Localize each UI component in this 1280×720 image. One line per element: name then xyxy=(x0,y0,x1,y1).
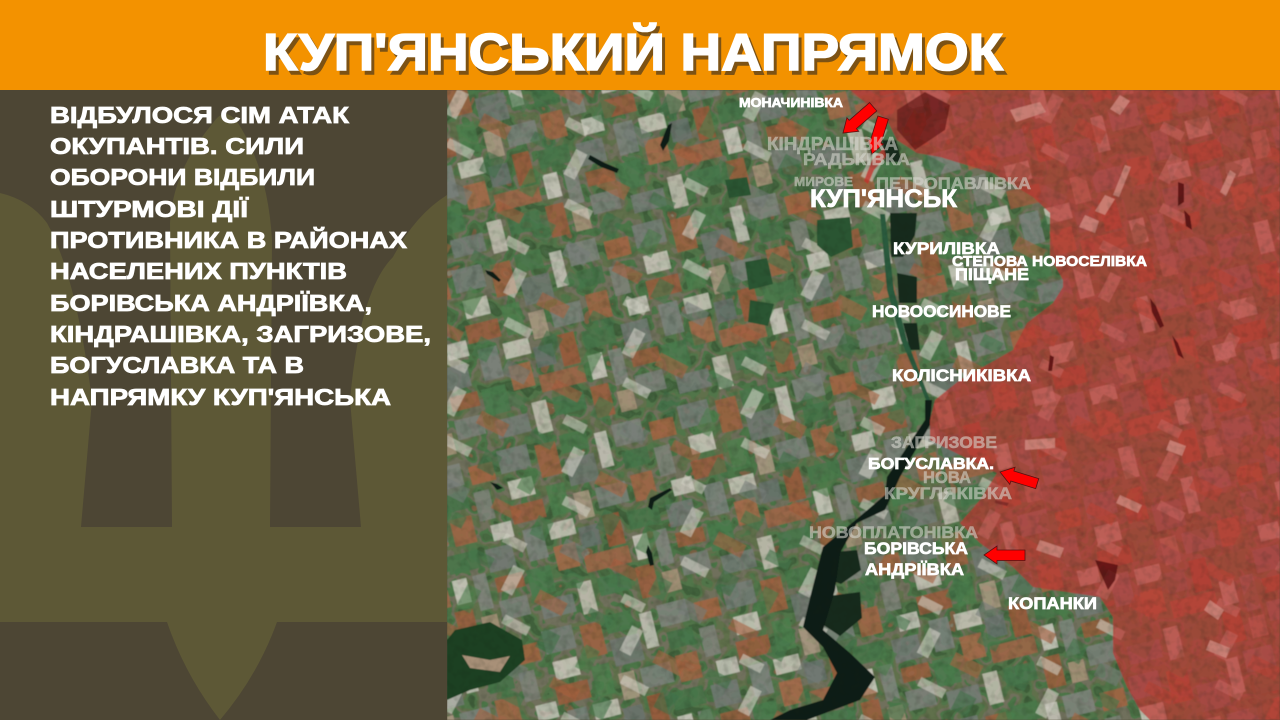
forest patches xyxy=(725,177,853,326)
river xyxy=(770,214,932,720)
summary text: БОГУСЛАВКА ТА В xyxy=(50,352,304,378)
label: Novoplatonivka: НОВОПЛАТОНІВКА xyxy=(809,523,978,542)
label: Kolisnykivka: КОЛІСНИКІВКА xyxy=(892,367,1031,385)
label: Stepova Novoselivka: СТЕПОВА НОВОСЕЛІВКА xyxy=(952,253,1147,270)
arrow: north attack 2 xyxy=(864,115,891,156)
forest bottom-left tan clearing xyxy=(462,655,510,672)
dark ponds xyxy=(485,123,1009,566)
trident emblem xyxy=(0,114,447,720)
label: Zahryzove: ЗАГРИЗОВЕ xyxy=(891,433,997,452)
title: КУП'ЯНСЬКИЙ НАПРЯМОК xyxy=(263,23,1003,82)
label: Pishchane: ПІЩАНЕ xyxy=(955,265,1029,284)
dark reservoir xyxy=(1095,560,1118,590)
summary text: КІНДРАШІВКА, ЗАГРИЗОВЕ, xyxy=(50,321,431,347)
summary text: ОКУПАНТІВ. СИЛИ xyxy=(50,133,304,159)
summary text: ПРОТИВНИКА В РАЙОНАХ xyxy=(50,226,407,253)
summary text: ОБОРОНИ ВІДБИЛИ xyxy=(50,164,315,190)
summary text: НАПРЯМКУ КУП'ЯНСЬКА xyxy=(50,384,391,410)
label: Petropavlivka: ПЕТРОПАВЛІВКА xyxy=(876,174,1031,193)
summary text: БОРІВСЬКА АНДРІЇВКА, xyxy=(50,290,372,316)
dark red field xyxy=(897,92,950,150)
label: Kindrashivka: КІНДРАШІВКА xyxy=(767,134,898,154)
label: Myrove: МИРОВЕ xyxy=(794,174,853,189)
occupied territory overlay xyxy=(850,90,1280,720)
label: Monachynivka: МОНАЧИНІВКА xyxy=(739,95,844,110)
satellite map xyxy=(447,90,1280,720)
label: Bohuslavka: БОГУСЛАВКА. xyxy=(868,456,994,473)
arrow: north attack 1 xyxy=(837,100,879,140)
arrow: Borivska Andriivka attack xyxy=(984,546,1025,564)
summary text: ВІДБУЛОСЯ СІМ АТАК xyxy=(50,102,350,128)
label: Borivska: БОРІВСЬКА xyxy=(864,539,968,558)
forest bottom-left xyxy=(447,622,525,700)
label: Kupiansk: КУП'ЯНСЬК xyxy=(810,185,958,213)
label: Kopanky: КОПАНКИ xyxy=(1008,594,1097,613)
summary text: ШТУРМОВІ ДІЇ xyxy=(50,196,249,222)
summary text xyxy=(50,102,431,410)
left panel xyxy=(0,90,447,720)
title: КУП'ЯНСЬКИЙ НАПРЯМОК xyxy=(266,27,1006,86)
label: Radkivka: РАДЬКІВКА xyxy=(803,150,910,169)
dark pools xyxy=(1048,182,1192,371)
label: Nova: НОВА xyxy=(923,468,971,487)
field grain xyxy=(447,90,1280,720)
header bar xyxy=(0,0,1280,90)
arrow: Bohuslavka attack xyxy=(997,463,1040,492)
light fields in occupied area xyxy=(1010,95,1236,658)
summary text: НАСЕЛЕНИХ ПУНКТІВ xyxy=(50,258,347,284)
dark forests along river xyxy=(820,140,920,636)
label: Krugliakivka: КРУГЛЯКІВКА xyxy=(884,484,1012,503)
label: Kurylivka: КУРИЛІВКА xyxy=(893,239,1000,258)
label: Novoosynove: НОВООСИНОВЕ xyxy=(872,303,1011,321)
label: Andriivka: АНДРІЇВКА xyxy=(865,560,964,579)
